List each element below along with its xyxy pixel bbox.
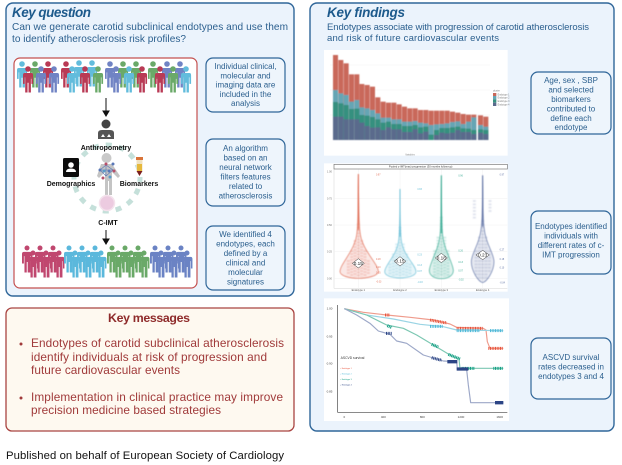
callout: contributors: endotype [555, 123, 588, 132]
y axis labels: 0.00 [327, 276, 333, 280]
violin: endotype 4: 0.18 [500, 259, 505, 261]
icon: neural network body [97, 153, 120, 195]
legend: + Endotype 3 [340, 378, 353, 381]
callout: endotypes: clinical and [226, 258, 265, 268]
chart: ASCVD survival curves [324, 298, 509, 421]
violin: endotype 4: 0.10 [500, 268, 505, 270]
x axis labels [352, 288, 490, 292]
callout: endotypes: molecular [228, 268, 263, 277]
message 1: identify individuals at risk of progression and [31, 350, 267, 364]
callout: data: Individual clinical, [214, 62, 277, 71]
legend: + Endotype 4 [340, 384, 353, 387]
callout: endotypes: defined by a [224, 249, 268, 258]
question text [12, 22, 288, 45]
callout: data: analysis [231, 99, 260, 108]
message 1 [20, 336, 284, 377]
message 1: Endotypes of carotid subclinical atherosclerosis [31, 336, 284, 350]
question text: to identify atherosclerosis risk profiles? [12, 34, 186, 45]
callout: survival: rates decreased in [538, 362, 604, 372]
endotype groups row [22, 246, 192, 278]
violin: endotype 3: 0.96 [458, 175, 464, 177]
label: anthropometry: Anthropometry [81, 145, 131, 152]
callout: data: imaging data are [216, 80, 276, 90]
message 2: Implementation in clinical practice may improve [31, 390, 283, 404]
callout: endotypes: endotypes, each [216, 240, 275, 248]
chart: stacked feature contribution bars [324, 50, 510, 156]
chart: stacked feature contribution bars: Variables [405, 153, 416, 156]
axis labels: 1200 [458, 415, 465, 419]
y axis labels: 0.50 [327, 223, 333, 227]
axis labels: 1600 [496, 415, 503, 419]
x axis labels: Endotype 3 [435, 288, 449, 292]
chart: violin plots of c-IMT progression [324, 163, 508, 292]
callout: data: molecular and [220, 72, 271, 80]
axis labels: 800 [420, 415, 425, 419]
legend: + Endotype 1 [340, 367, 352, 370]
violin: endotype 2: 0.23 [417, 254, 423, 256]
violin: endotype 2: 0.83 [417, 189, 423, 191]
violin: endotype 3: 0.13 [458, 262, 464, 264]
callout: contributors [531, 72, 611, 134]
callout: algorithm: based on an [223, 154, 268, 162]
violin: endotype 2: 0.15 [395, 259, 405, 264]
violin: endotype 2: -0.03 [417, 282, 423, 284]
heading: key findings: Key findings [327, 5, 405, 20]
callout: data [206, 58, 285, 112]
legend: Endotype 3 [498, 100, 510, 103]
heading: key messages: Key messages [108, 311, 190, 325]
axis labels: 400 [381, 415, 386, 419]
findings summary: and risk of future cardiovascular events [327, 33, 499, 44]
violin: endotype 4: 0.23 [478, 253, 488, 258]
findings summary: Endotypes associate with progression of carotid atherosclerosis [327, 22, 589, 33]
callout: progression: IMT progression [542, 250, 600, 260]
violin: endotype 1 [340, 174, 382, 284]
callout: endotypes: signatures [227, 278, 264, 286]
callout: contributors: and selected [548, 86, 594, 94]
question text: Can we generate carotid subclinical endotypes and use them [12, 22, 288, 33]
bars [333, 55, 488, 140]
footer credit: Published on behalf of European Society of Cardiology [6, 450, 284, 462]
callout: progression: individuals with [544, 232, 598, 240]
violin: endotype 2 [385, 189, 423, 284]
callout: survival: ASCVD survival [543, 353, 600, 362]
label: demographics: Demographics [47, 181, 95, 188]
axis labels: 0.90 [327, 362, 333, 366]
callout: algorithm: related to [229, 182, 263, 191]
callout: endotypes: We identified 4 [219, 230, 272, 239]
callout: survival [531, 338, 611, 399]
callout: contributors: define each [550, 114, 592, 123]
arrow: population to features [103, 98, 109, 116]
icon: carotid cross-section [100, 196, 114, 210]
violin: endotype 4: 0.27 [500, 250, 505, 252]
violin: endotype 1: 0.18 [376, 259, 381, 261]
violin: endotype 4: -0.04 [500, 282, 506, 284]
violin: endotype 1: 0.97 [376, 174, 381, 176]
callout: progression [531, 211, 611, 274]
population row [17, 60, 191, 92]
callout: algorithm: filters features [220, 172, 271, 182]
axis labels: 0.95 [327, 334, 333, 338]
label: c-IMT: C-IMT [98, 220, 118, 227]
survival curves [344, 309, 503, 403]
legend: Endotype 2 [498, 97, 510, 100]
findings summary [327, 22, 589, 44]
legend: Endotype 4 [498, 103, 510, 106]
x axis labels: Endotype 2 [393, 288, 407, 292]
violin: endotype 2: 0.07 [417, 271, 423, 273]
callout: algorithm: neural network [219, 163, 273, 172]
violin: endotype 4: 0.97 [500, 175, 505, 177]
icon: demographics [63, 158, 79, 177]
y axis labels: 0.25 [327, 250, 333, 254]
icon: anthropometry person [98, 120, 114, 139]
callout: data: included in the [220, 90, 272, 99]
callout: contributors: biomarkers [551, 95, 591, 104]
callout: algorithm: An algorithm [223, 144, 268, 153]
message 2: precision medicine based strategies [31, 403, 221, 417]
plot title: Pooled c-IMT(max) progression (30 months follow-up) [389, 165, 453, 169]
axis labels [327, 307, 503, 419]
callout: contributors: contributed to [547, 104, 596, 114]
arrow: features to endotypes [103, 230, 109, 244]
message 2 [20, 390, 283, 417]
x axis labels: Endotype 1 [352, 288, 366, 292]
x axis labels: Endotype 4 [476, 288, 490, 292]
panel: study workflow diagram [14, 58, 197, 288]
icon: biomarkers tube [136, 157, 143, 176]
ring of features [74, 145, 140, 211]
violin: endotype 2: 0.13 [417, 265, 423, 267]
violin: endotype 3: 0.07 [458, 271, 464, 273]
y axis labels: 1.00 [327, 169, 333, 173]
violin: endotype 1: 0.15 [354, 261, 363, 266]
label: biomarkers: Biomarkers [120, 181, 158, 188]
violin: endotype 3: 0.26 [458, 250, 464, 252]
panel: key findings [310, 3, 614, 431]
heading: key question: Key question [12, 5, 91, 20]
axis labels: 0 [343, 415, 345, 419]
axis labels: 0.85 [327, 389, 333, 393]
violin: endotype 3 [429, 175, 464, 281]
callout: endotypes [206, 226, 285, 290]
legend [493, 90, 510, 106]
callout: survival: endotypes 3 and 4 [538, 372, 604, 381]
violin: endotype 1: -0.03 [376, 282, 382, 284]
legend [340, 356, 365, 387]
legend: + Endotype 2 [340, 373, 352, 376]
legend: cluster [493, 90, 500, 93]
violin: endotype 1: 0.10 [376, 267, 381, 269]
callout: progression: Endotypes identified [535, 222, 607, 231]
axis labels: 1.00 [327, 307, 333, 311]
violin: endotype 4 [471, 175, 506, 284]
violin: endotype 3: 0.18 [437, 256, 446, 261]
message 1: future cardiovascular events [31, 363, 180, 377]
callout: progression: different rates of c- [538, 241, 605, 250]
y axis labels: 0.75 [327, 196, 333, 200]
legend: Endotype 1 [498, 93, 510, 96]
callout: algorithm: atherosclerosis [219, 192, 272, 200]
callout: contributors: Age, sex , SBP [544, 76, 598, 85]
violin: endotype 3: -0.02 [458, 279, 464, 281]
plot title [334, 164, 507, 169]
panel: key messages [6, 308, 294, 431]
y axis labels [327, 169, 333, 280]
callout: algorithm [206, 139, 285, 206]
legend: ASCVD survival [341, 356, 365, 360]
panel: key question [6, 3, 294, 296]
violin: endotype 1: 0.05 [376, 273, 381, 275]
